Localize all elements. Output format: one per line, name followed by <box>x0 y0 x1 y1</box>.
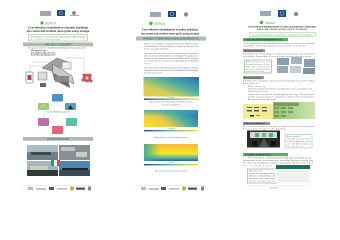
forecasting text: Main features: <box>243 82 260 85</box>
project logo: SEREN <box>265 21 275 25</box>
monitoring callout: Visualization of real <box>246 63 271 66</box>
project logo: SEREN <box>45 21 57 25</box>
title: Cost-effective rehabilitation of public buildings <box>28 26 89 30</box>
sharing text: management across the infrastructure and allows sharing resources from <box>243 159 314 162</box>
heading: optimization <box>243 122 270 125</box>
monitoring callout: Main features are <box>246 60 270 64</box>
panel: middle poster, analysis results <box>136 11 206 190</box>
heading: results: PROJECT RESEARCH ANALYSIS RESULTS <box>143 37 199 41</box>
heat map 2 <box>144 110 198 131</box>
callout: for public buildings <box>30 39 60 41</box>
photo callout: Main features <box>286 135 301 138</box>
heading: tools <box>243 38 288 41</box>
forecasting text <box>243 80 316 101</box>
heading: forecasting: Scenario dashboard <box>244 77 261 79</box>
heading: project concept: PROJECT CONCEPT <box>45 43 72 47</box>
title <box>27 26 90 33</box>
heading: tools: 1. BUILDING ENERGY MANAGEMENT TOOL <box>245 38 284 41</box>
title: COST-EFFECTIVE REHABILITATION OF PUBLIC BUILDINGS INTO SMART AND <box>248 26 317 28</box>
title <box>141 28 200 36</box>
sharing table <box>276 165 310 183</box>
heat map 2: PV capacity <box>167 127 175 130</box>
caption 3: Figure: Net present value of the investment <box>155 170 188 172</box>
sharing text: the community of buildings. Tools for evaluating the efficiency and costs of <box>243 162 314 165</box>
heading: forecasting <box>243 76 264 79</box>
footer logos <box>23 186 93 190</box>
callout: Demonstration of nano-grid with storage and renewable integration <box>30 35 86 38</box>
intro text <box>243 42 316 48</box>
project logo: SEREN <box>154 22 166 26</box>
body text: of the nano-grid elements. <box>144 48 169 50</box>
heading: energy sharing <box>243 153 288 156</box>
caption 1: Figure: Pareto front for the building rehabilitation scenario <box>150 100 193 104</box>
sharing text <box>243 156 314 167</box>
optimization text <box>243 125 315 130</box>
heading: results <box>136 36 206 41</box>
footer logos <box>136 186 206 190</box>
photo callout <box>285 134 312 148</box>
callout: Tools developed and experience gathered in the project <box>252 33 312 36</box>
forecasting text: Calculate energy performance regarding electricity consumption and <box>248 88 312 91</box>
forecasting text: Energy efficiency indicators <box>248 98 276 101</box>
body text: of rehabilitation of the building to provide the optimal size <box>144 45 198 48</box>
sharing text: the sharing model. <box>243 164 274 167</box>
sharing callout: for all the participants <box>249 180 275 182</box>
sharing callout <box>248 169 276 183</box>
monitoring callout: devices and building <box>246 69 270 71</box>
concept bullets: The project aims to rehabilitate buildings into nano-grids with: <box>28 46 86 50</box>
header logos <box>150 11 188 17</box>
photo callout: building devices using <box>286 141 310 143</box>
caption 2: Figure: Payback of the nano-grid investment <box>154 136 188 139</box>
monitoring text: A dashboard for monitoring the energy flow, generation and consumption <box>243 52 315 55</box>
body text: The work illustrates how a trend is characterised by positive <box>144 52 198 55</box>
callout <box>250 32 316 36</box>
forecasting text: A dashboard for simulation and forecasting energy efficiency of the building. <box>243 80 316 83</box>
heading: monitoring <box>243 49 265 52</box>
heading: optimization: Optimization dashboard <box>244 122 265 125</box>
body text: reducing investments for net cost of rehabilitation of the buildings <box>144 69 198 72</box>
body text: Pareto curve analysis is evaluated based on different levels <box>144 42 198 46</box>
concept bullets: Smart Energy Management <box>31 54 56 57</box>
energy management icons: Demand Side Management <box>46 111 70 114</box>
intro text: Three applications were developed for energy and thermal management <box>243 42 316 45</box>
body text: area. <box>144 62 152 65</box>
forecasting text: Load curves comparison considering battery usage, PV generation <box>248 93 314 96</box>
panel: left poster, concept <box>23 10 93 190</box>
energy management icons <box>38 94 77 134</box>
concept bullets: Storage/Flexibility Services <box>31 51 56 54</box>
footer logos <box>248 186 310 188</box>
control room photo <box>247 130 280 148</box>
heat map 1 <box>144 77 199 100</box>
heading: pilot site: PILOTS AND SITES <box>47 138 69 141</box>
heading: pilot site <box>23 137 93 141</box>
monitoring callout: time data of monitored <box>246 66 270 68</box>
header logos <box>260 10 298 17</box>
title: RESILIENT NANO-GRIDS USING STORAGE <box>257 28 308 31</box>
monitoring text: of buildings, showing data in real-time and historical series per device <box>243 55 311 58</box>
intro text: of buildings and energy systems in the two pilots of the project: <box>243 44 308 48</box>
header logos <box>40 10 79 16</box>
heat map 1: PV capacity <box>168 96 175 99</box>
heading: project concept <box>23 42 93 47</box>
title: Cost-effective rehabilitation of public buildings <box>142 28 199 32</box>
optimization text: An integrated building energy management system that manages <box>243 125 315 128</box>
photo callout: Optimize the use of the <box>286 138 310 140</box>
sharing callout: Main features: <box>249 170 264 172</box>
project logo <box>149 22 166 26</box>
monitoring text <box>243 52 315 58</box>
body text: The curves show results that the pareto front provides the solution <box>144 66 198 70</box>
monitoring callout <box>244 60 272 73</box>
caption 1: net cost of rehabilitation <box>162 104 180 106</box>
heat map 3: PV capacity <box>167 161 175 164</box>
title: into smart and resilient nano-grids using storage <box>27 29 90 33</box>
sharing callout: between nearby buildings and <box>249 174 275 178</box>
sharing text: The tool proposes a decision-making methodology with flexible energy <box>248 156 311 159</box>
callout <box>28 34 88 41</box>
building diagram <box>26 58 92 88</box>
forecasting text: Main features: <box>248 85 266 88</box>
project logo <box>260 21 275 25</box>
green table <box>273 102 315 119</box>
body text: reveals that the investment savings from BESS and PV systems <box>144 57 198 60</box>
dashboard screenshots <box>277 57 315 74</box>
body text: and economical and investment considerations. The comparison <box>144 54 198 58</box>
sharing callout: evaluation of economic gains <box>249 177 275 180</box>
title <box>248 26 317 31</box>
caption 1 <box>150 100 193 106</box>
photo callout: real time data and price <box>286 142 310 146</box>
concept bullets <box>28 46 86 57</box>
photo callout: forecasting <box>286 145 302 148</box>
forecasting text: thermal load curves <box>248 90 268 93</box>
photo grid <box>27 145 90 176</box>
panel: right poster, tools <box>243 10 317 188</box>
heat map 3 <box>144 144 198 165</box>
concept bullets: Microgrid design <box>31 50 47 52</box>
project logo <box>40 21 57 25</box>
body text: are relevant for the economical sustainability of the building <box>144 60 198 62</box>
optimization text: devices and storage in the building <box>243 128 285 130</box>
forecasting text: and EV charging based on rehabilitation options and user behaviour <box>248 95 314 98</box>
monitoring callout: historical series <box>246 70 264 73</box>
sharing callout: Shared use of energy resources <box>249 173 275 175</box>
body text: and the nano-grid. <box>144 72 162 74</box>
title: into smart and resilient nano-grids using storage <box>141 32 200 36</box>
heading: monitoring: Monitoring dashboard <box>244 49 263 52</box>
heading: energy sharing: 2. ENERGY SHARING TOOL <box>245 153 272 156</box>
body text <box>144 42 198 74</box>
yellow table <box>243 104 273 119</box>
